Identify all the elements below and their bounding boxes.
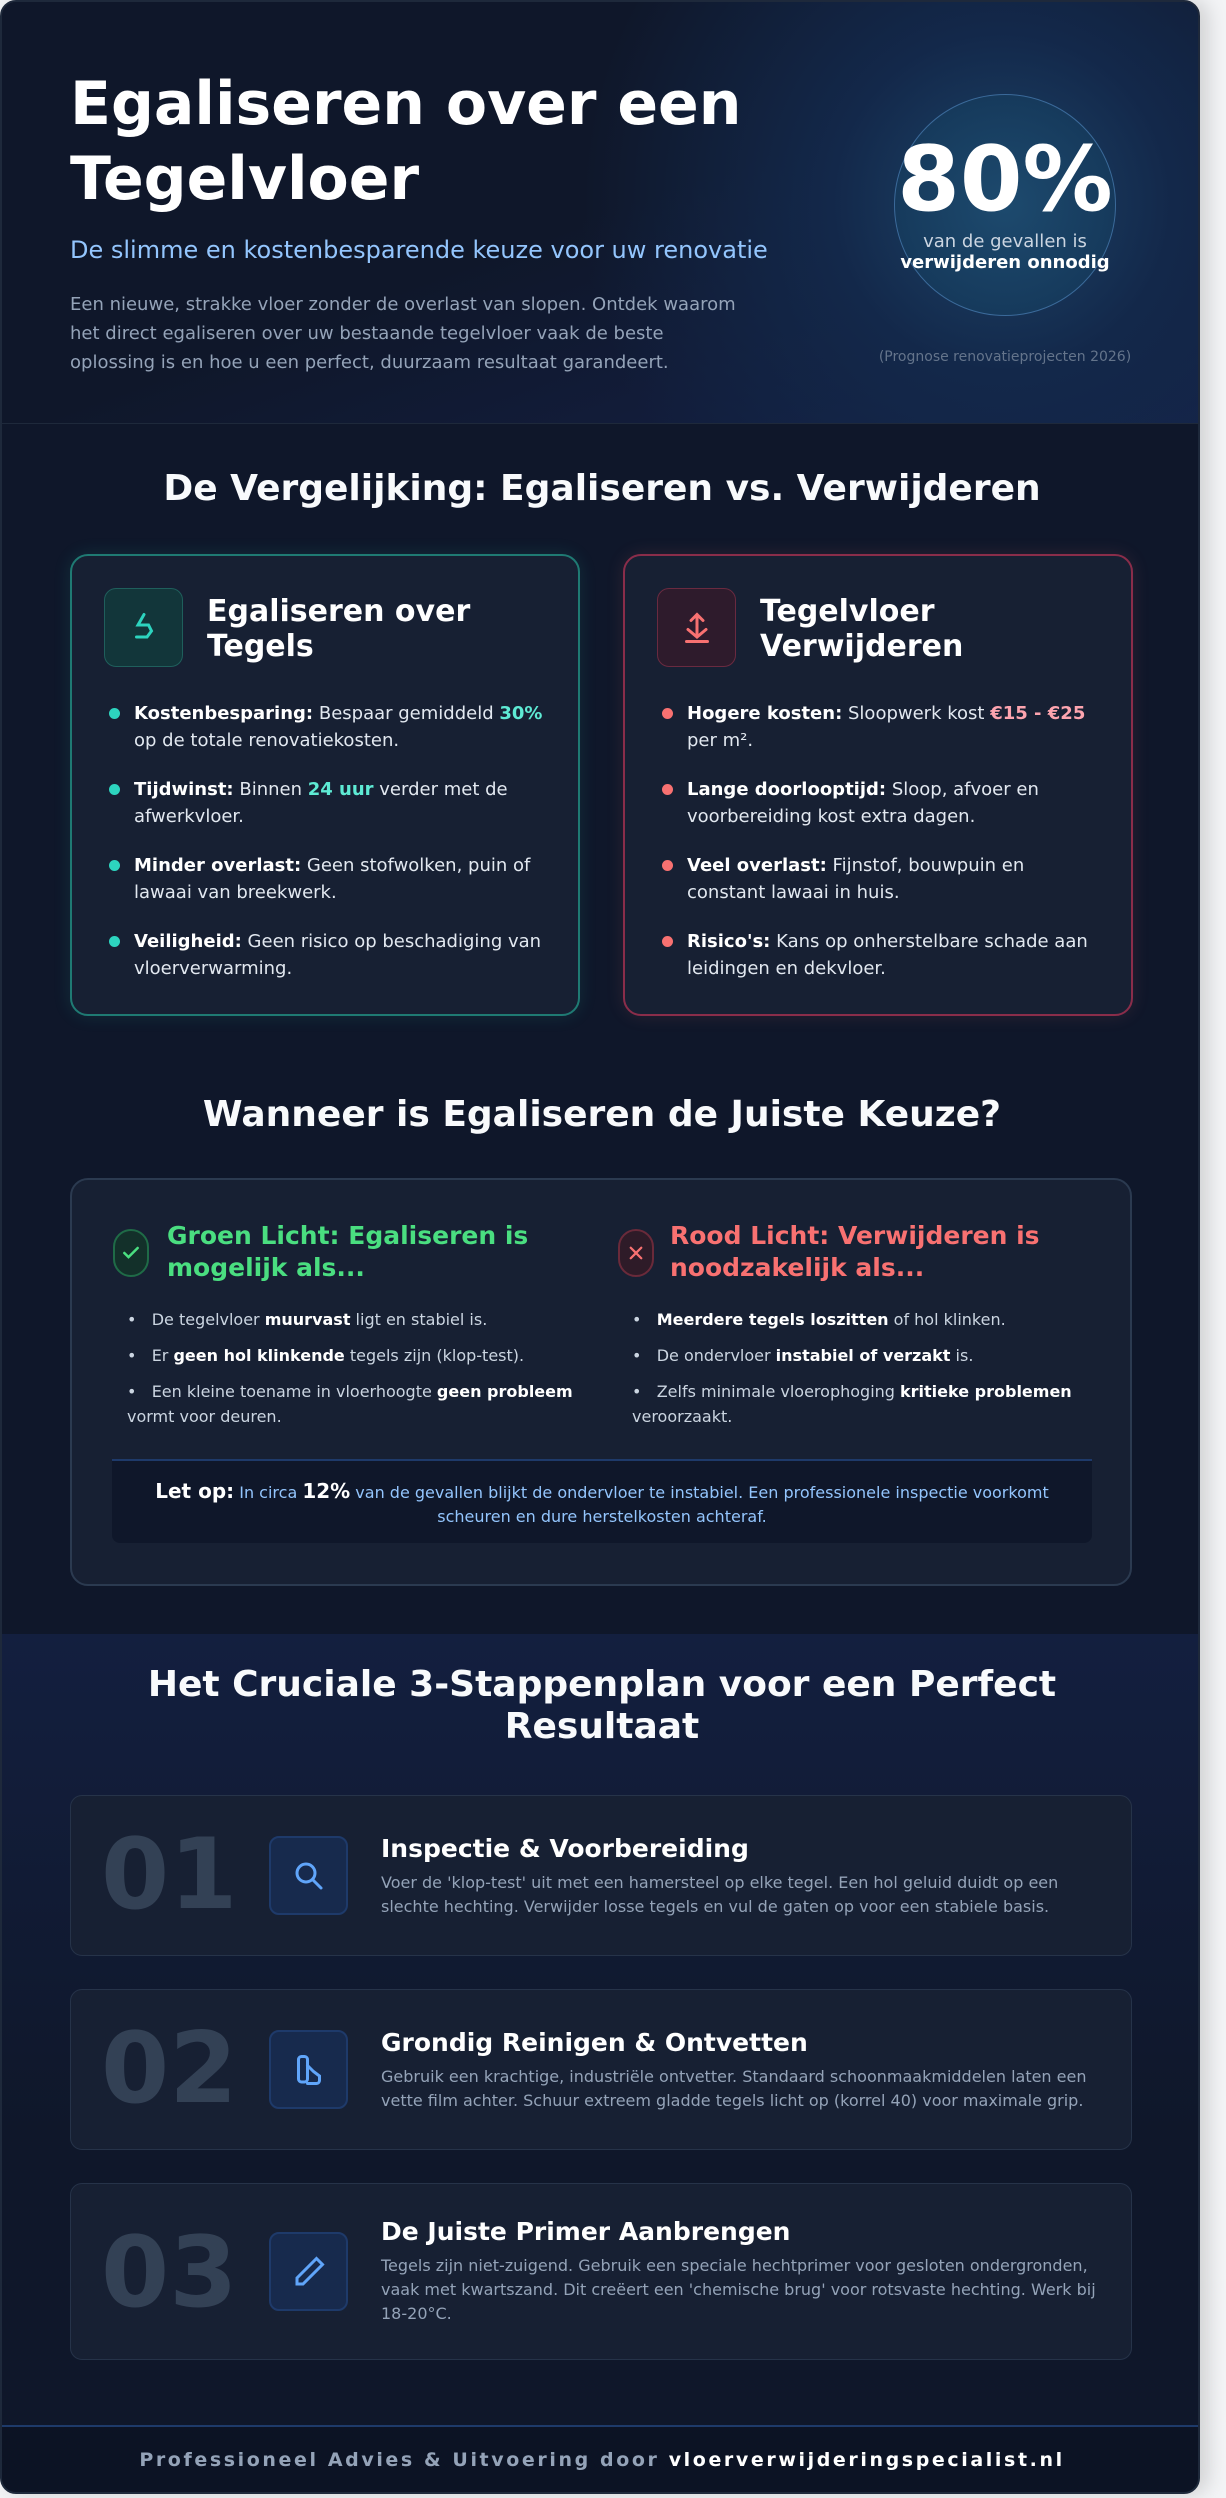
benefits list: Kostenbesparing: Bespaar gemiddeld 30% op de totale renovatiekosten. [134, 703, 542, 751]
card title: Egaliseren over [207, 594, 470, 629]
green list: • De tegelvloer muurvast ligt en stabiel is. [127, 1310, 487, 1329]
number: 03 [101, 2216, 237, 2330]
title [70, 69, 741, 214]
stat source: (Prognose renovatieprojecten 2026) [879, 349, 1131, 365]
step 3 [70, 2183, 1132, 2360]
intro paragraph: het direct egaliseren over uw bestaande tegelvloer vaak de beste [70, 323, 664, 344]
red list: • Meerdere tegels loszitten of hol klinken. [632, 1310, 1006, 1329]
icon: cross [618, 1229, 654, 1277]
step title: Inspectie & Voorbereiding [381, 1834, 749, 1863]
step title: Grondig Reinigen & Ontvetten [381, 2028, 808, 2057]
step text: Voer de 'klop-test' uit met een hamersteel op elke tegel. Een hol geluid duidt op een slechte hechting. Verwijder losse tegels en vul de gaten op voor een stabiele basis. [381, 1873, 1058, 1916]
subtitle: De slimme en kostenbesparende keuze voor uw renovatie [70, 236, 768, 264]
red heading: Rood Licht: Verwijderen is [670, 1221, 1040, 1250]
drawbacks list: Lange doorlooptijd: Sloop, afvoer en voorbereiding kost extra dagen. [687, 779, 1039, 827]
step 2 [70, 1989, 1132, 2150]
panel: egaliseren [70, 554, 580, 1016]
header [2, 2, 1202, 424]
red list: • Zelfs minimale vloerophoging kritieke problemen veroorzaakt. [632, 1382, 1072, 1426]
red list [632, 1310, 1072, 1426]
title: Egaliseren over een [70, 69, 741, 139]
green list: • Een kleine toename in vloerhoogte geen probleem vormt voor deuren. [127, 1382, 573, 1426]
drawbacks list: Hogere kosten: Sloopwerk kost €15 - €25 per m². [687, 703, 1085, 751]
card title: Tegels [207, 629, 314, 664]
green heading: mogelijk als... [167, 1253, 365, 1282]
title: Tegelvloer [70, 144, 419, 214]
intro paragraph [70, 294, 736, 373]
heading: steps: Het Cruciale 3-Stappenplan voor een Perfect [148, 1664, 1056, 1705]
icon: removal [657, 588, 736, 667]
icon: pencil [269, 2232, 348, 2311]
benefits list [109, 703, 542, 979]
drawbacks list: Veel overlast: Fijnstof, bouwpuin en constant lawaai in huis. [687, 855, 1024, 903]
heading: steps: Resultaat [505, 1706, 699, 1747]
section background steps [2, 1634, 1202, 2134]
icon: search [269, 1836, 348, 1915]
number: 01 [101, 1818, 237, 1932]
panel: decision box [70, 1178, 1132, 1586]
intro paragraph: Een nieuwe, strakke vloer zonder de overlast van slopen. Ontdek waarom [70, 294, 736, 315]
step text: Tegels zijn niet-zuigend. Gebruik een speciale hechtprimer voor gesloten ondergronden, vaak met kwartszand. Dit creëert een 'chemische brug' voor rotsvaste hechting. Werk bij 18-20°C. [381, 2256, 1096, 2323]
stat circle: van de gevallen is [923, 231, 1087, 252]
red heading [670, 1221, 1040, 1282]
green list: • Er geen hol klinkende tegels zijn (klop-test). [127, 1346, 524, 1365]
benefits list: Tijdwinst: Binnen 24 uur verder met de afwerkvloer. [134, 779, 508, 827]
callout: let op [112, 1459, 1092, 1543]
step title: De Juiste Primer Aanbrengen [381, 2217, 790, 2246]
heading: when: Wanneer is Egaliseren de Juiste Keuze? [203, 1094, 1001, 1135]
drawbacks list: Risico's: Kans op onherstelbare schade aan leidingen en dekvloer. [687, 931, 1088, 979]
benefits list: Minder overlast: Geen stofwolken, puin of lawaai van breekwerk. [134, 855, 530, 903]
card title: Tegelvloer [760, 594, 935, 629]
stat circle [894, 94, 1116, 316]
icon: trowel [104, 588, 183, 667]
callout: let op: Let op: In circa 12% van de gevallen blijkt de ondervloer te instabiel. Een professionele inspectie voorkomt scheuren en dure herstelkosten achteraf. [155, 1479, 1049, 1526]
icon: check [113, 1229, 149, 1277]
green heading [167, 1221, 528, 1282]
step text: Gebruik een krachtige, industriële ontvetter. Standaard schoonmaakmiddelen laten een vette film achter. Schuur extreem gladde tegels licht op (korrel 40) voor maximale grip. [381, 2067, 1086, 2110]
panel: verwijderen [623, 554, 1133, 1016]
card title [207, 594, 470, 664]
red list: • De ondervloer instabiel of verzakt is. [632, 1346, 973, 1365]
intro paragraph: oplossing is en hoe u een perfect, duurzaam resultaat garandeert. [70, 352, 669, 373]
step 1 [70, 1795, 1132, 1956]
green heading: Groen Licht: Egaliseren is [167, 1221, 528, 1250]
card title: Verwijderen [760, 629, 963, 664]
number: 02 [101, 2012, 237, 2126]
stat circle: 80% [897, 127, 1113, 232]
card title [760, 594, 963, 664]
heading: comparison: De Vergelijking: Egaliseren vs. Verwijderen [163, 468, 1041, 509]
footer [2, 2425, 1202, 2498]
red heading: noodzakelijk als... [670, 1253, 924, 1282]
benefits list: Veiligheid: Geen risico op beschadiging van vloerverwarming. [134, 931, 541, 979]
drawbacks list [662, 703, 1088, 979]
footer: Professioneel Advies & Uitvoering door vloerverwijderingspecialist.nl [139, 2449, 1065, 2471]
icon: cleaner [269, 2030, 348, 2109]
green list [127, 1310, 573, 1426]
stat circle: verwijderen onnodig [900, 252, 1110, 273]
heading: steps [148, 1664, 1056, 1747]
